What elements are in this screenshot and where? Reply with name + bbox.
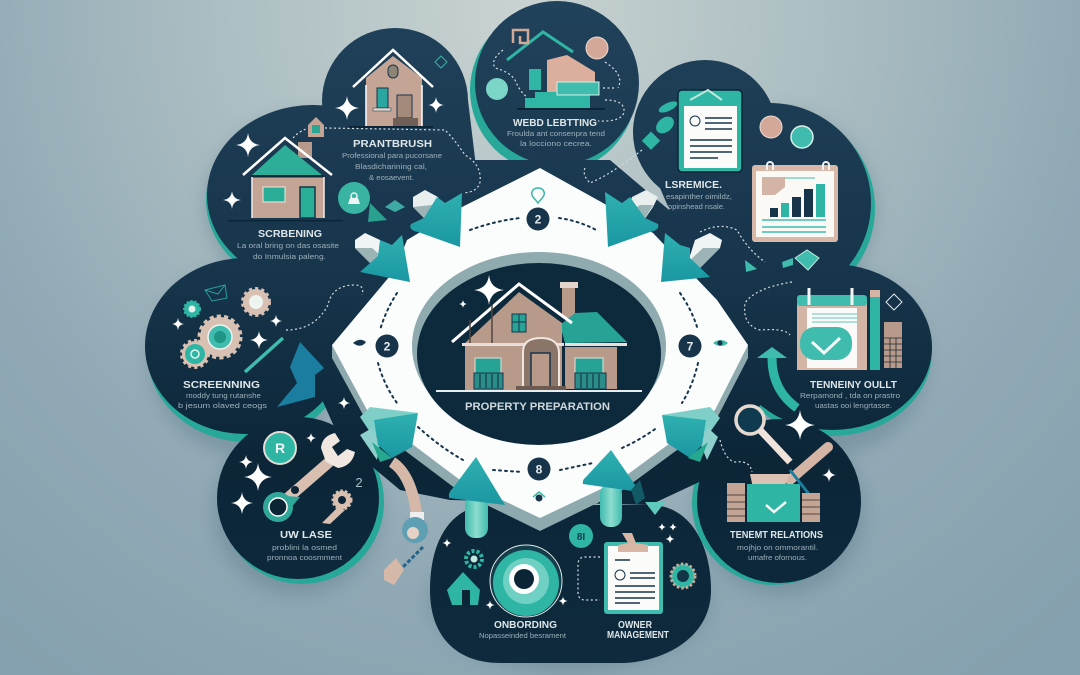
icon: house with teal roof [228, 138, 343, 222]
label: web lighting: WEBD LEBTTING [513, 118, 597, 129]
label: owner management: MANAGEMENT [607, 630, 669, 641]
icon: numbered badge: 8I [577, 532, 585, 543]
description: prantbrush: Professional para pucorsane [342, 151, 442, 160]
icon: lock badge [338, 182, 405, 222]
icon: checklist document [678, 90, 742, 172]
icon: right gear [671, 564, 695, 588]
label: lsremice: LSREMICE. [665, 180, 722, 191]
hub inner lens [412, 252, 666, 445]
description: web lighting: la locciono cecrea. [520, 139, 592, 148]
label: owner management: OWNER [618, 620, 653, 631]
description: screening: do Inmulsia paleng. [253, 252, 326, 261]
icon: wrench [263, 433, 355, 522]
icon: teal gem [745, 250, 819, 272]
description: use case: pronnoa coosmment [267, 553, 343, 562]
description: tenant relations: mojhjo on ommorantil. [737, 543, 818, 552]
description: use case: problini la osmed [272, 543, 337, 552]
number badge: top 2 [526, 208, 550, 230]
number: 2: 2 [355, 475, 363, 490]
number badge: left 2: 2 [384, 340, 391, 354]
icon: numbered badge [569, 524, 593, 548]
label: tenant relations: TENEMT RELATIONS [730, 530, 823, 541]
number badge: right 7 [678, 334, 702, 358]
panel rims: teal edges [147, 7, 932, 585]
chart: calendar bar chart [752, 162, 838, 242]
connector: dotted path [293, 128, 480, 193]
connector: dashed bracket [578, 557, 600, 600]
central hub: white diamond with grey edge [332, 168, 748, 531]
description: tenant relations [737, 543, 818, 562]
icon: teal badge [486, 78, 508, 100]
connector: dotted paths [584, 150, 765, 262]
description: screening: La oral bring on das osasite [237, 241, 339, 250]
connector: dotted path [745, 282, 792, 335]
arrow 7: bottom left [449, 457, 505, 538]
icon: sparkles [335, 96, 444, 120]
label: prantbrush: PRANTBRUSH [353, 139, 432, 150]
icon: small house [447, 572, 480, 605]
icon: small gear [466, 551, 482, 567]
icon: R badge: R [275, 440, 285, 456]
description: tenancy [800, 391, 900, 410]
icon: sparkles [785, 410, 836, 482]
panel: use case [231, 432, 363, 562]
arrow 8: bottom right [583, 450, 640, 527]
arrow 3: upper right inner [605, 190, 658, 247]
icon: corner bracket [513, 30, 528, 43]
label: use case: UW LASE [280, 530, 332, 541]
icon: gem [631, 480, 665, 515]
icon: teal badge [791, 126, 813, 148]
icon: key [736, 406, 790, 462]
label: screening: SCRBENING [258, 229, 322, 240]
icon: clipboard [604, 533, 663, 614]
connector: dotted paths [494, 50, 624, 121]
description: screenning: b jesum olaved ceogs [178, 401, 267, 410]
panel: web lighting [486, 30, 624, 148]
icon: teal curved arrow [757, 347, 797, 408]
icon: sparkles [442, 523, 677, 610]
label: tenancy: TENNEINY OULLT [810, 380, 897, 391]
panel: tenant relations [720, 406, 836, 562]
panel: screening upper [223, 117, 405, 261]
arrow 2: upper left outer [355, 233, 410, 282]
description: screenning [178, 391, 267, 410]
panel: onboarding and management [442, 480, 695, 641]
number badge: right 7: 7 [687, 340, 694, 354]
label: onboarding: ONBORDING [494, 620, 557, 631]
panel shadows [150, 110, 927, 670]
icon: small diamond [435, 56, 447, 68]
panel: prantbrush [293, 50, 480, 193]
description: web lighting [507, 129, 605, 148]
number badge: top 2: 2 [535, 212, 542, 226]
icon: blue arrow [277, 342, 324, 407]
description: use case [267, 543, 343, 562]
number badge: bottom 8: 8 [536, 462, 543, 476]
icon: teal wrench shape [642, 99, 679, 150]
description: tenancy: Rerpamond , tda on prastro [800, 391, 900, 400]
description: prantbrush: & eosaevent. [369, 173, 414, 182]
hub dotted ring [378, 218, 698, 472]
number badge: bottom 8 [528, 458, 550, 480]
arrow 6: lower right [662, 407, 720, 462]
icon: sparkles [223, 133, 260, 209]
icon: sparkles [231, 433, 316, 514]
icon: folder with check [727, 447, 828, 522]
icon: cottage [348, 50, 433, 128]
description: screening [237, 241, 339, 261]
arrow 4: upper right outer [661, 233, 722, 282]
panel: lsremice [584, 90, 838, 272]
description: web lighting: Froulda ant consenpra tend [507, 129, 605, 138]
icon: envelope [205, 285, 227, 301]
panel: screening left [172, 285, 363, 410]
description: tenancy: uastas ooi lengrtasse. [815, 401, 892, 410]
panel: tenancy [745, 282, 902, 410]
icon: modern house [507, 32, 605, 110]
icon: tan badge [586, 37, 608, 59]
description: prantbrush: Blasdicharining cal, [355, 162, 427, 171]
icon: hanging hose and chain [384, 462, 428, 585]
icon: key gear [322, 491, 351, 524]
connector: dotted path [720, 440, 752, 472]
arrow 1: upper left inner [410, 190, 462, 247]
number badge: left 2 [376, 334, 398, 358]
central house illustration [436, 275, 642, 392]
icon: pencil [245, 338, 283, 372]
icon: teal disc [490, 545, 562, 617]
description: onboarding: Nopasseinded besrament [479, 631, 567, 640]
description: prantbrush [342, 151, 442, 182]
hub small icons [353, 188, 728, 502]
icon: small house [308, 117, 324, 137]
label: screenning: SCREENNING [183, 380, 260, 391]
description: tenant relations: umafre ofornous. [748, 553, 807, 562]
label: owner management [607, 620, 669, 641]
description: lsremice: esapinther oimildz, [666, 192, 732, 201]
connector: dotted path [286, 285, 363, 330]
panel backgrounds: dark navy blobs [145, 1, 932, 663]
icon: tan badge [760, 116, 782, 138]
hub title: PROPERTY PREPARATION [465, 401, 610, 413]
description: lsremice [666, 192, 732, 211]
icon: gears [182, 289, 269, 367]
icon: calendar with check [797, 288, 902, 370]
description: screenning: moddy tung rutanshe [186, 391, 261, 400]
arrow 5: lower left [360, 407, 418, 462]
icon: sparkles [172, 315, 350, 409]
description: lsremice: opinshead nsale. [668, 202, 725, 211]
